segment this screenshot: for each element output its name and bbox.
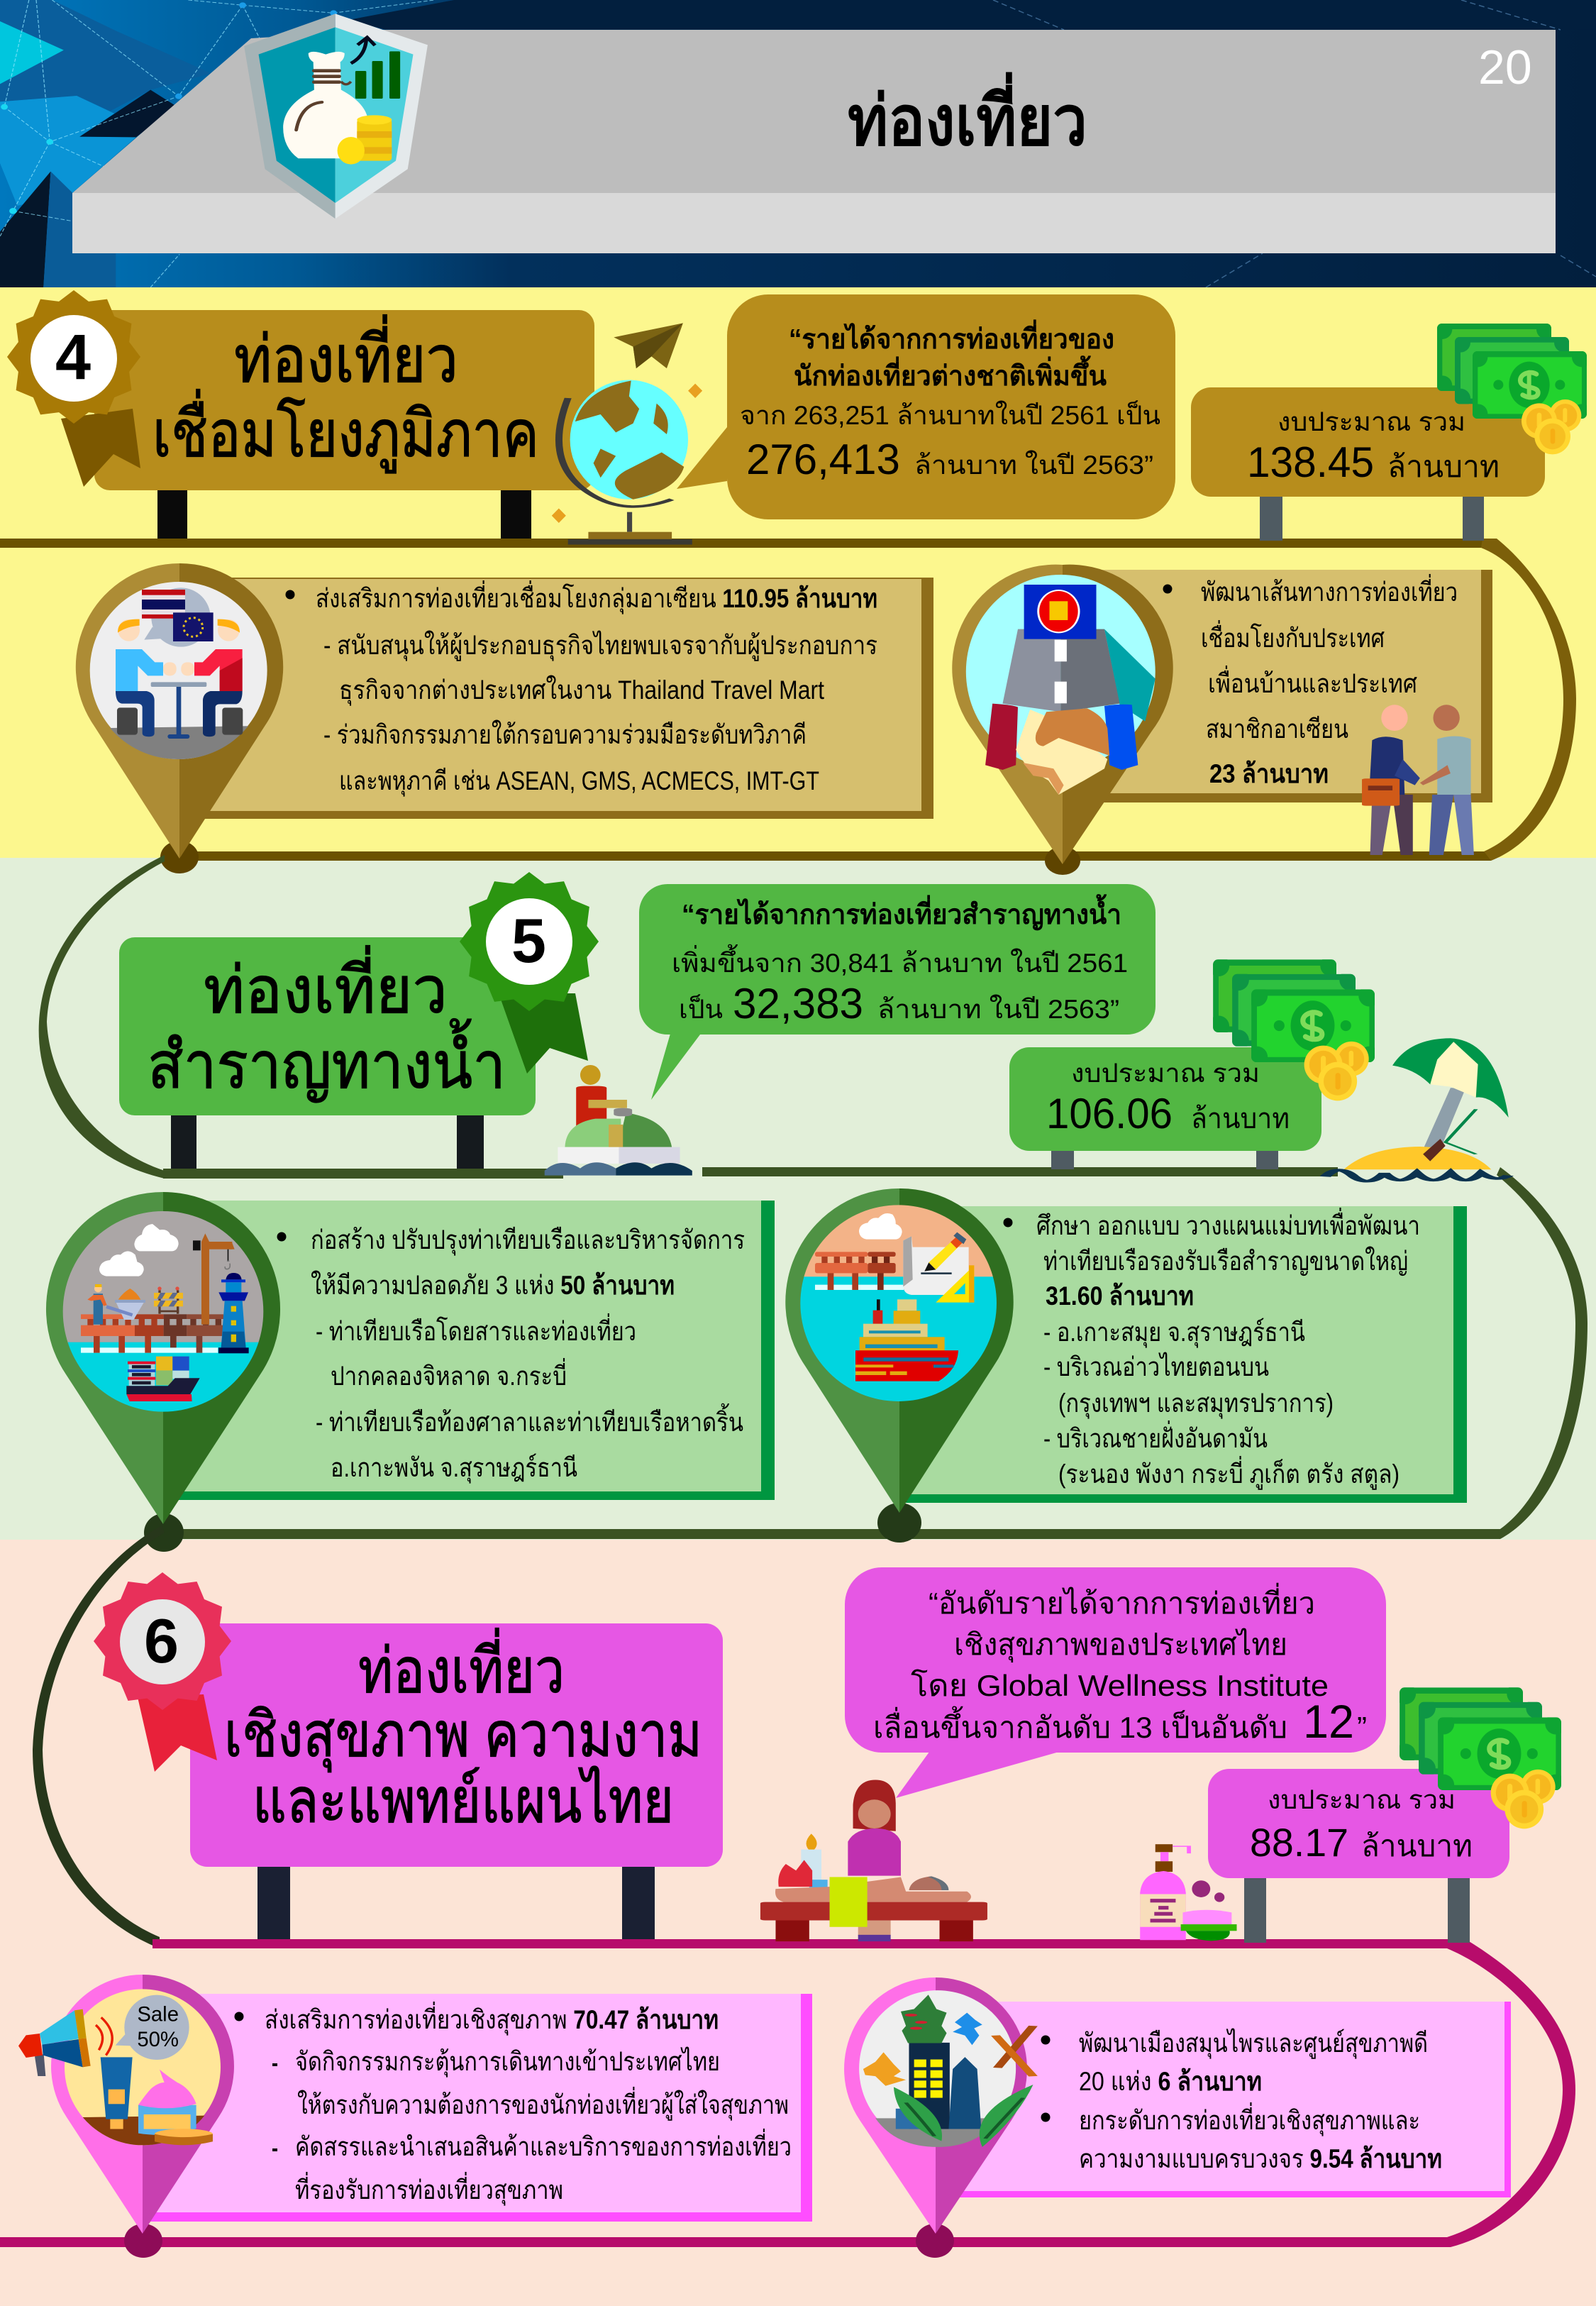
- panel: ASEAN promotion: - สนับสนุนให้ผู้ประกอบธุรกิจไทยพบเจรจากับผู้ประกอบการ: [323, 630, 877, 661]
- icon: money section 4: [1432, 319, 1592, 454]
- budget sign: section 6: งบประมาณ รวม: [1268, 1785, 1456, 1814]
- panel: port construction: ก่อสร้าง ปรับปรุงท่าเทียบเรือและบริหารจัดการ: [311, 1225, 745, 1256]
- panel: wellness promotion: คัดสรรและนำเสนอสินค้าและบริการของการท่องเที่ยว: [295, 2128, 792, 2161]
- section 5: cruise tourism: [39, 855, 1587, 1552]
- pin: port construction: [46, 1192, 280, 1524]
- panel: marina master plan: - อ.เกาะสมุย จ.สุราษฎร์ธานี: [1043, 1318, 1305, 1348]
- callout: revenue section 4: “รายได้จากการท่องเที่ยวของ: [789, 319, 1114, 355]
- icon: business meeting: [90, 582, 267, 759]
- callout: wellness ranking: ”: [1357, 1711, 1367, 1744]
- callout: revenue section 4: 276,413: [746, 436, 900, 483]
- panel: marina master plan: - บริเวณชายฝั่งอันดามัน: [1043, 1420, 1268, 1453]
- panel: ASEAN promotion: ส่งเสริมการท่องเที่ยวเชื่อมโยงกลุ่มอาเซียน 110.95 ล้านบาท: [316, 580, 877, 614]
- budget sign: section 4: งบประมาณ รวม: [1278, 407, 1465, 436]
- panel: wellness promotion: จัดกิจกรรมกระตุ้นการเดินทางเข้าประเทศไทย: [295, 2046, 720, 2078]
- panel: route development: เชื่อมโยงกับประเทศ: [1201, 619, 1385, 653]
- badge: number 6: 6: [144, 1606, 179, 1676]
- sign: section 5 title: สำราญทางน้ำ: [148, 1018, 506, 1103]
- panel: herbal cities: ความงามแบบครบวงจร 9.54 ล้านบาท: [1079, 2144, 1442, 2173]
- sign: section 4 title: [94, 310, 594, 539]
- pin: wellness promotion: [18, 1975, 234, 2258]
- panel: marina master plan: (ระนอง พังงา กระบี่ ภูเก็ต ตรัง สตูล): [1058, 1455, 1400, 1490]
- panel: herbal cities: 20 แห่ง 6 ล้านบาท: [1079, 2067, 1262, 2096]
- icon: spa bottle and soap: [1140, 1844, 1237, 1941]
- callout: wellness ranking: [845, 1567, 1386, 1798]
- budget sign: section 4: [1191, 387, 1545, 541]
- panel: route development: เพื่อนบ้านและประเทศ: [1208, 665, 1417, 698]
- panel: marina master plan: ท่าเทียบเรือรองรับเรือสำราญขนาดใหญ่: [1043, 1246, 1408, 1276]
- callout: revenue section 5: [639, 884, 1156, 1100]
- panel: route development: 23 ล้านบาท: [1209, 759, 1329, 788]
- budget sign: section 6: 88.17: [1250, 1820, 1348, 1865]
- callout: wellness ranking: โดย Global Wellness Institute: [911, 1668, 1329, 1702]
- section 4 background: [0, 287, 1596, 858]
- panel: ASEAN promotion: [170, 578, 933, 819]
- knots: section 5 pin bases: [144, 1503, 921, 1552]
- panel: wellness promotion: [145, 1994, 812, 2222]
- road: section 4: [0, 539, 1576, 861]
- section 6 background: [0, 1540, 1596, 2306]
- badge: number 5: 5: [511, 905, 546, 976]
- road: section 5: [39, 855, 1587, 1539]
- sign: section 6 title: เชิงสุขภาพ ความงาม: [224, 1699, 702, 1772]
- callout: revenue section 5: 32,383: [733, 980, 863, 1027]
- badge: number 4: [7, 290, 140, 487]
- panel: route development: [1064, 570, 1492, 802]
- sign: section 6 title: [190, 1623, 723, 1939]
- section 4: connected tourism: [0, 290, 1592, 875]
- budget sign: section 6: ล้านบาท: [1361, 1829, 1473, 1863]
- callout: revenue section 4: นักท่องเที่ยวต่างชาติเพิ่มขึ้น: [794, 355, 1107, 392]
- callout: revenue section 4: จาก 263,251 ล้านบาทในปี 2561 เป็น: [740, 399, 1160, 430]
- sign: section 6 title: และแพทย์แผนไทย: [253, 1765, 674, 1836]
- callout: revenue section 5: เพิ่มขึ้นจาก 30,841 ล้านบาท ในปี 2561: [672, 944, 1128, 978]
- icon: globe and paper plane: [552, 323, 702, 545]
- panel: herbal cities: [936, 2002, 1511, 2197]
- panel: marina master plan: (กรุงเทพฯ และสมุทรปราการ): [1058, 1389, 1334, 1419]
- icon: sale megaphone and cosmetics: [18, 1989, 221, 2145]
- icon: sale megaphone and cosmetics: 50%: [137, 2028, 179, 2051]
- icon: pier, crane, lighthouse and cargo ship: [62, 1211, 265, 1413]
- sign: section 6 title: ท่องเที่ยว: [358, 1628, 565, 1706]
- panel: wellness promotion: ที่รองรับการท่องเที่ยวสุขภาพ: [295, 2171, 563, 2206]
- section 6: wellness tourism: [0, 1526, 1575, 2258]
- icon: traveller on a boat: [545, 1065, 692, 1176]
- callout: revenue section 5: “รายได้จากการท่องเที่ยวสำราญทางน้ำ: [682, 894, 1121, 931]
- panel: wellness promotion: ส่งเสริมการท่องเที่ยวเชิงสุขภาพ 70.47 ล้านบาท: [265, 2001, 719, 2036]
- icon: money section 6: [1395, 1683, 1567, 1828]
- panel: marina master plan: [901, 1206, 1467, 1503]
- panel: herbal cities: ยกระดับการท่องเที่ยวเชิงสุขภาพและ: [1079, 2102, 1420, 2136]
- callout: wellness ranking: 12: [1303, 1695, 1354, 1748]
- pin: herbal cities: [844, 1977, 1033, 2258]
- callout: revenue section 5: เป็น: [679, 993, 723, 1024]
- panel: port construction: ปากคลองจิหลาด จ.กระบี่: [331, 1357, 567, 1391]
- panel: ASEAN promotion: และพหุภาคี เช่น ASEAN, GMS, ACMECS, IMT-GT: [339, 766, 819, 797]
- panel: title plate: [72, 30, 1556, 253]
- icon: shield with money bag: [244, 13, 428, 219]
- panel: route development: สมาชิกอาเซียน: [1206, 715, 1348, 744]
- icon: money section 5: [1208, 955, 1380, 1100]
- budget sign: section 4: 138.45: [1247, 438, 1374, 486]
- panel: wellness promotion: ให้ตรงกับความต้องการของนักท่องเที่ยวผู้ใส่ใจสุขภาพ: [297, 2086, 789, 2121]
- panel: ASEAN promotion: ธุรกิจจากต่างประเทศในงาน Thailand Travel Mart: [339, 675, 825, 706]
- panel: port construction: ให้มีความปลอดภัย 3 แห่ง 50 ล้านบาท: [311, 1270, 675, 1300]
- badge: number 6: [94, 1572, 231, 1772]
- budget sign: section 5: ล้านบาท: [1191, 1103, 1290, 1135]
- callout: revenue section 4: [677, 294, 1175, 519]
- callout: wellness ranking: เชิงสุขภาพของประเทศไทย: [954, 1628, 1287, 1663]
- icon: massage scene: [760, 1780, 987, 1941]
- road: section 6: [0, 1526, 1575, 2247]
- pin: ASEAN road handshake: [952, 565, 1173, 875]
- panel: port construction: - ท่าเทียบเรือท้องศาลาและท่าเทียบเรือหาดริ้น: [316, 1403, 743, 1437]
- budget sign: section 5: 106.06: [1046, 1090, 1173, 1137]
- budget sign: section 5: [1009, 1047, 1321, 1169]
- panel: port construction: - ท่าเทียบเรือโดยสารและท่องเที่ยว: [316, 1313, 636, 1346]
- badge: number 5: [460, 872, 599, 1074]
- callout: revenue section 4: ล้านบาท ในปี 2563”: [914, 450, 1153, 480]
- panel: route development: พัฒนาเส้นทางการท่องเที่ยว: [1201, 573, 1458, 607]
- pin: marina master plan: [785, 1188, 1014, 1513]
- icon: pier, blueprint and cruise ship: [799, 1204, 998, 1402]
- panel: herbal cities: พัฒนาเมืองสมุนไพรและศูนย์สุขภาพดี: [1079, 2028, 1428, 2059]
- icon: beach umbrella island: [1325, 1038, 1509, 1181]
- section 5 background: [0, 858, 1596, 1540]
- budget sign: section 5: งบประมาณ รวม: [1071, 1059, 1260, 1088]
- panel: marina master plan: ศึกษา ออกแบบ วางแผนแม่บทเพื่อพัฒนา: [1036, 1207, 1420, 1240]
- icon: sale megaphone and cosmetics: Sale: [137, 2002, 179, 2026]
- pin: ASEAN meeting: [76, 563, 283, 873]
- budget sign: section 4: ล้านบาท: [1387, 450, 1500, 483]
- sign: section 5 title: [119, 937, 536, 1169]
- panel: ASEAN promotion: - ร่วมกิจกรรมภายใต้กรอบความร่วมมือระดับทวิภาคี: [323, 719, 807, 749]
- header banner: [0, 0, 1596, 287]
- panel: marina master plan: - บริเวณอ่าวไทยตอนบน: [1043, 1352, 1269, 1381]
- panel: port construction: [170, 1201, 775, 1500]
- icon: herbs and city: [859, 1990, 1033, 2147]
- budget sign: section 6: [1208, 1769, 1509, 1943]
- title: ท่องเที่ยว: [848, 72, 1087, 160]
- badge: number 4: 4: [55, 322, 91, 393]
- callout: wellness ranking: เลื่อนขึ้นจากอันดับ 13 เป็นอันดับ: [873, 1706, 1287, 1744]
- icon: two travellers: [1362, 705, 1474, 855]
- page number: 20: [1478, 40, 1532, 94]
- callout: wellness ranking: “อันดับรายได้จากการท่องเที่ยว: [929, 1583, 1315, 1620]
- panel: marina master plan: 31.60 ล้านบาท: [1046, 1281, 1194, 1311]
- icon: ASEAN road and handshake: [966, 575, 1156, 795]
- panel: port construction: อ.เกาะพงัน จ.สุราษฎร์ธานี: [331, 1453, 577, 1484]
- sign: section 5 title: ท่องเที่ยว: [204, 945, 448, 1027]
- sign: section 4 title: ท่องเที่ยว: [234, 314, 458, 396]
- callout: revenue section 5: ล้านบาท ในปี 2563”: [877, 994, 1119, 1024]
- sign: section 4 title: เชื่อมโยงภูมิภาค: [153, 389, 539, 473]
